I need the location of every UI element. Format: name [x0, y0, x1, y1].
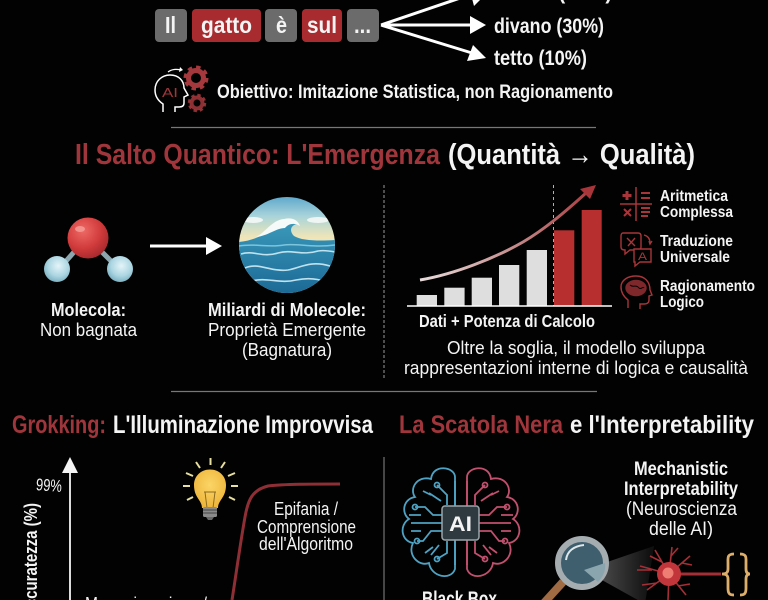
label: billions of molecules: Proprietà Emergente: [208, 319, 366, 340]
token: sul: [302, 9, 342, 42]
label: mechanistic interpretability: Interpretability: [624, 479, 738, 500]
tick label: 99%: 99%: [35, 475, 63, 496]
heading: black box: [399, 411, 754, 439]
heading: emergence: [75, 139, 695, 171]
token: è: è: [276, 12, 287, 38]
accuracy curve: [232, 484, 340, 600]
token: è: [265, 9, 297, 42]
label: epiphany: [257, 499, 356, 554]
label: logical reasoning: Ragionamento: [660, 278, 755, 295]
label: arithmetic: [660, 188, 733, 221]
icon: neuron: [637, 547, 721, 600]
label: logical reasoning: Logico: [660, 294, 704, 311]
label: translation: Universale: [660, 249, 730, 266]
label: epiphany: Comprensione: [257, 517, 356, 537]
token: ellipsis: ...: [354, 12, 371, 38]
icon: arithmetic: [620, 187, 652, 221]
label: mechanistic interpretability: Mechanistic: [634, 459, 728, 480]
caption: rappresentazioni interne di logica e causalità: [404, 357, 749, 378]
y axis: [62, 457, 78, 600]
icon: translation: [621, 233, 652, 266]
token: Il: [155, 9, 187, 42]
label: epiphany: Epifania /: [274, 499, 338, 519]
axis label: Dati + Potenza di Calcolo: [419, 311, 595, 331]
icon: code braces: [722, 554, 750, 595]
icon: AI head with gears: AI: [162, 85, 178, 100]
caption: Oltre la soglia, il modello sviluppa: [447, 337, 706, 358]
heading: emergence: (Quantità → Qualità): [448, 139, 695, 171]
label: molecule: [40, 299, 138, 340]
label: arithmetic: Aritmetica: [660, 188, 728, 205]
heading: grokking: Grokking:: [12, 411, 106, 439]
label: translation: Traduzione: [660, 233, 733, 250]
label: mechanistic interpretability: [624, 459, 738, 540]
panel: black box and interpretability: [403, 459, 750, 600]
label: epiphany: dell'Algoritmo: [259, 534, 353, 554]
heading: emergence: Il Salto Quantico: L'Emergenza: [75, 139, 441, 171]
panel: grokking chart: [21, 457, 356, 600]
token: gatto: [192, 9, 261, 42]
icon: magnifying glass: [543, 539, 606, 600]
beam of light: [584, 546, 654, 600]
label: logical reasoning: [660, 278, 755, 311]
label: billions of molecules: (Bagnatura): [242, 339, 332, 360]
token: gatto: gatto: [201, 12, 252, 38]
icon: AI head with gears: [155, 67, 207, 112]
label: mechanistic interpretability: (Neuroscienza: [626, 499, 737, 520]
bar chart: data and compute: [407, 185, 612, 306]
icon: head with brain: [621, 276, 652, 309]
icon: water molecule: [44, 218, 133, 282]
icon: light bulb: [183, 458, 238, 520]
panel: threshold chart: [404, 185, 755, 378]
arrows: next word options: [381, 0, 488, 61]
label: molecule: Molecola:: [51, 299, 126, 320]
token: sul: sul: [307, 12, 337, 38]
heading: grokking: L'Illuminazione Improvvisa: [113, 411, 374, 439]
option: tetto: tetto (10%): [494, 47, 587, 70]
caption: [404, 337, 749, 378]
label: mechanistic interpretability: delle AI): [649, 519, 713, 540]
label: billions of molecules: [208, 299, 366, 360]
icon: AI circuit brain: [403, 468, 519, 576]
objective text: Obiettivo: Imitazione Statistica, non Ragionamento: [217, 82, 613, 103]
label: billions of molecules: Miliardi di Molecole:: [208, 299, 366, 320]
panel: emergence analogy: [40, 197, 366, 360]
icon: AI circuit brain: AI: [449, 513, 472, 536]
token: ellipsis: [347, 9, 379, 42]
heading: grokking: [12, 411, 374, 439]
option: divano: divano (30%): [494, 15, 604, 38]
icon: translation: A: [638, 251, 648, 263]
icon: ocean wave: [239, 197, 335, 293]
label: translation: [660, 233, 733, 266]
arrow: molecule to wave: [150, 237, 222, 255]
panel: next-word prediction: [155, 0, 613, 112]
heading: black box: La Scatola Nera: [399, 411, 564, 439]
label: molecule: Non bagnata: [40, 319, 138, 340]
token: Il: Il: [165, 12, 176, 38]
label: arithmetic: Complessa: [660, 204, 733, 221]
